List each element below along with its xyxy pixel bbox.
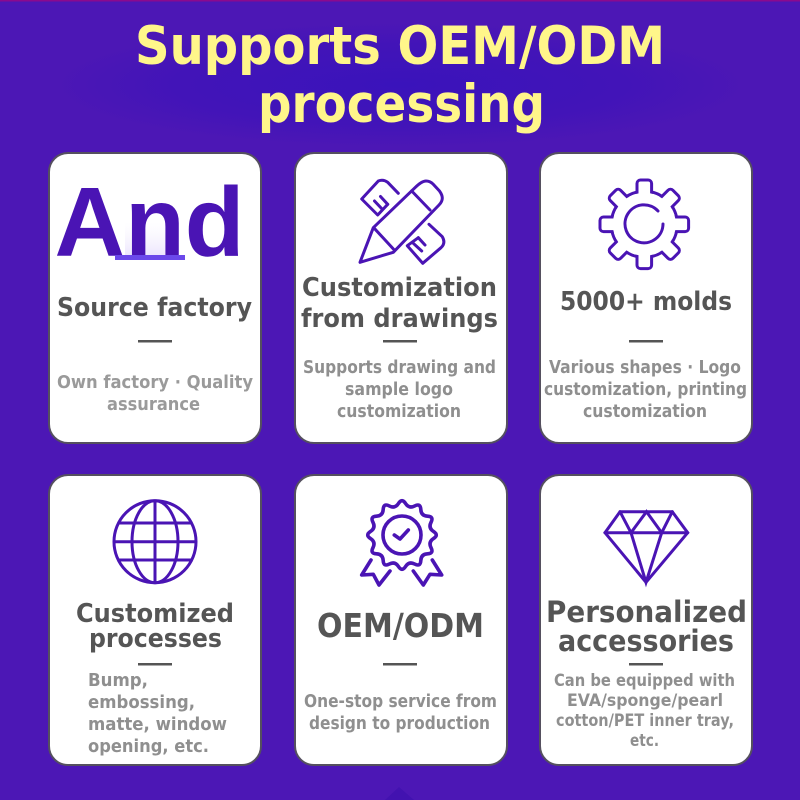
- heading: customization from drawings: Customization: [302, 273, 497, 303]
- panel: customization from drawings: [295, 153, 507, 443]
- panel: customized processes: [49, 475, 261, 765]
- heading: personalized accessories: Personalized: [546, 595, 747, 629]
- description: customized processes: embossing,: [88, 693, 195, 713]
- heading: customization from drawings: [301, 273, 498, 334]
- description: OEM/ODM: design to production: [309, 714, 490, 734]
- description: personalized accessories: Can be equipped with: [554, 671, 735, 690]
- description: OEM/ODM: One-stop service from: [304, 692, 497, 712]
- title: Supports OEM/ODM: [135, 16, 665, 77]
- description: 5000+ molds: customization: [583, 402, 707, 422]
- panel: 5000+ molds: [540, 153, 752, 443]
- icon: globe: [114, 501, 196, 583]
- panel: OEM/ODM: [295, 475, 507, 765]
- description: customization from drawings: Supports drawing and: [303, 358, 496, 378]
- description: customization from drawings: sample logo: [345, 380, 453, 400]
- heading: customized processes: processes: [89, 624, 222, 654]
- divider: [383, 340, 417, 342]
- description: customized processes: opening, etc.: [88, 737, 209, 757]
- heading: source factory: Source factory: [57, 293, 252, 323]
- icon: certified badge: [362, 501, 442, 585]
- heading: personalized accessories: accessories: [558, 624, 734, 658]
- heading: 5000+ molds: 5000+ molds: [560, 287, 732, 317]
- icon: pencil and ruler: [360, 180, 444, 263]
- panel: personalized accessories: [540, 475, 752, 765]
- description: 5000+ molds: [544, 358, 747, 422]
- description: personalized accessories: etc.: [630, 731, 659, 750]
- description: customized processes: matte, window: [88, 715, 227, 735]
- heading: customized processes: [76, 599, 234, 654]
- description: personalized accessories: cotton/PET inner tray,: [556, 711, 734, 730]
- description: customization from drawings: [303, 358, 496, 422]
- divider: [138, 663, 172, 666]
- description: 5000+ molds: customization, printing: [544, 380, 747, 400]
- heading: customized processes: Customized: [76, 599, 234, 629]
- divider: [138, 340, 172, 342]
- description: source factory: assurance: [107, 395, 200, 415]
- heading: OEM/ODM: OEM/ODM: [317, 606, 484, 645]
- panel: source factory: [49, 153, 261, 443]
- title: [135, 16, 665, 135]
- description: customized processes: [88, 671, 227, 757]
- divider: [383, 663, 417, 666]
- divider: [629, 340, 663, 342]
- heading: personalized accessories: [546, 595, 747, 658]
- description: personalized accessories: EVA/sponge/pearl: [567, 691, 723, 710]
- description: 5000+ molds: Various shapes · Logo: [549, 358, 741, 378]
- icon: And wordmark: And: [54, 167, 244, 277]
- description: personalized accessories: [554, 671, 735, 750]
- description: customized processes: Bump,: [88, 671, 148, 691]
- description: OEM/ODM: [304, 692, 497, 734]
- icon: gear: [600, 180, 689, 269]
- divider: [629, 663, 663, 666]
- description: source factory: Own factory · Quality: [57, 373, 254, 393]
- description: customization from drawings: customization: [337, 402, 461, 422]
- heading: customization from drawings: from drawings: [301, 304, 498, 334]
- arrow: bottom triangle: [385, 787, 414, 800]
- title: processing: [258, 74, 545, 135]
- description: source factory: [57, 373, 254, 415]
- icon: diamond: [605, 512, 688, 582]
